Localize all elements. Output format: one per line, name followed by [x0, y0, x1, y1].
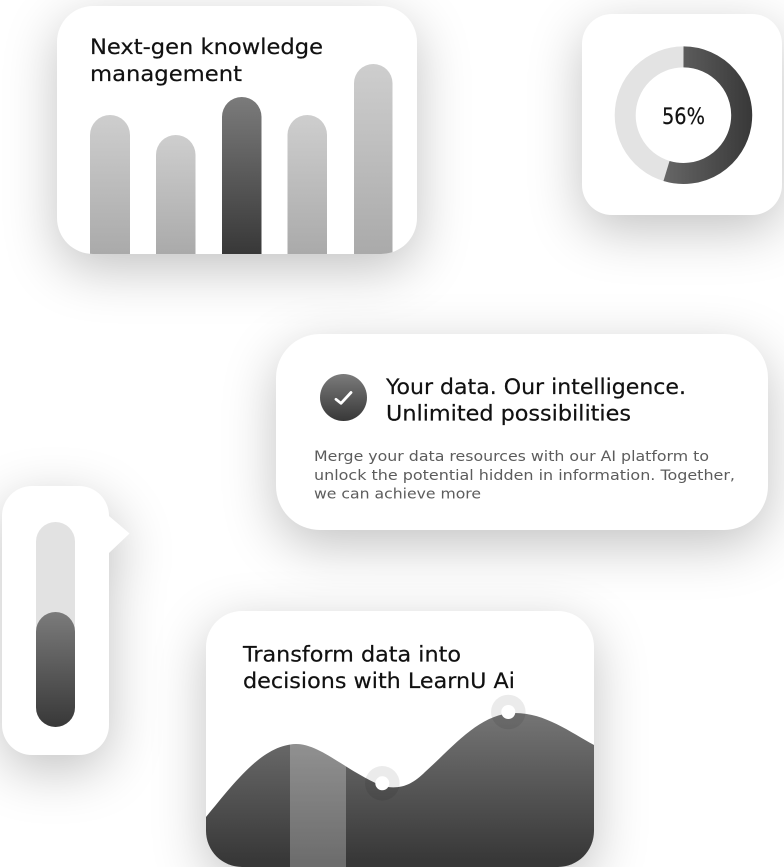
data point: high: [491, 695, 526, 729]
bar chart: [90, 64, 392, 254]
donut value: 56%: [662, 105, 705, 130]
panel: your data card: [276, 334, 768, 530]
panel: transform data area chart card: [206, 611, 594, 867]
panel: knowledge management bar chart card: [57, 6, 417, 254]
heading: next-gen knowledge management: [90, 35, 323, 86]
slider fill: [36, 612, 75, 727]
heading: transform data: decisions with LearnU Ai: [243, 669, 515, 693]
heading: next-gen knowledge management: management: [90, 62, 242, 86]
icon: check badge: [320, 374, 367, 421]
heading: your data: [385, 375, 686, 426]
heading: transform data: [242, 642, 515, 693]
body text: unlock the potential hidden in information. Together,: [314, 468, 735, 484]
heading: next-gen knowledge management: Next-gen knowledge: [90, 35, 323, 59]
area chart: [206, 713, 594, 867]
body text: Merge your data resources with our AI platform to: [314, 449, 709, 465]
panel: donut chart card: [582, 14, 782, 215]
body text: we can achieve more: [314, 486, 481, 502]
donut chart 56 percent: [625, 57, 742, 174]
panel: slider speech-bubble card: [2, 486, 130, 755]
data point: low: [365, 766, 400, 801]
slider track: [36, 522, 75, 727]
heading: your data: Unlimited possibilities: [386, 402, 631, 426]
highlight band: [290, 735, 346, 867]
heading: transform data: Transform data into: [242, 642, 461, 666]
heading: your data: Your data. Our intelligence.: [385, 375, 686, 399]
body text: [314, 449, 735, 502]
